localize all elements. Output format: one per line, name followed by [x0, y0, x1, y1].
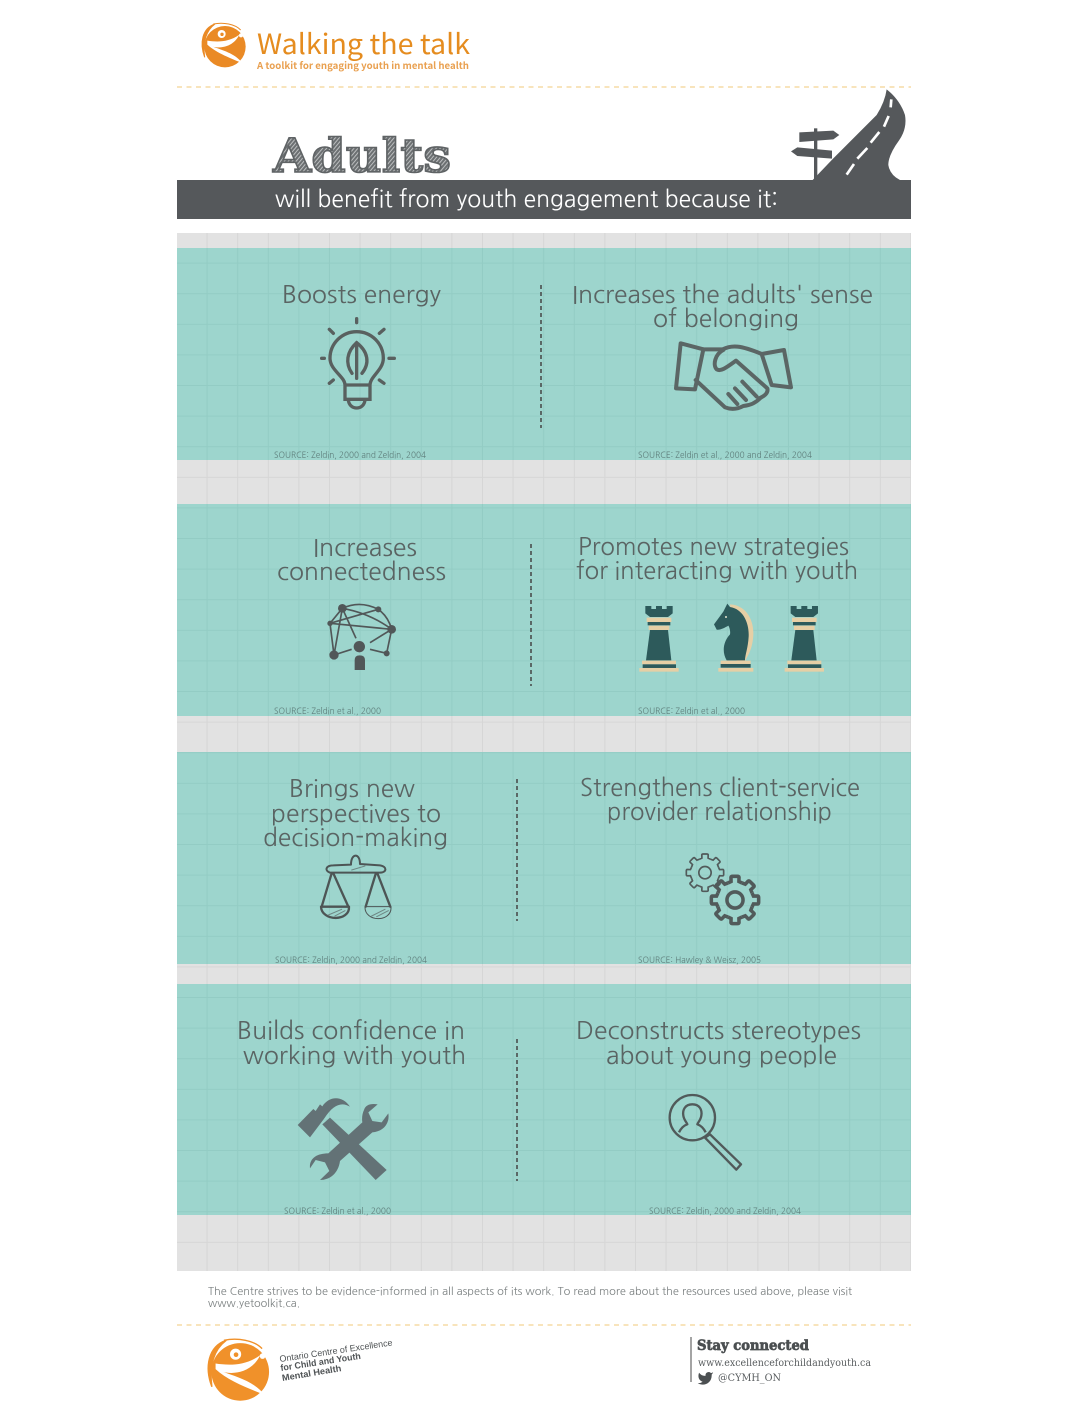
source: SOURCE: Zeldin et al., 2000	[638, 707, 745, 716]
icon: knight	[714, 604, 753, 672]
icon: small gear	[686, 854, 724, 891]
header title: Walking the talk	[257, 23, 471, 63]
evidence statement	[208, 1286, 852, 1309]
icon: hammer and wrench	[298, 1098, 389, 1180]
heading: Deconstructs stereotypes about young people: about young people	[606, 1044, 837, 1068]
source: SOURCE: Hawley & Weisz, 2005	[638, 956, 761, 965]
heading: Builds confidence in working with youth: working with youth	[243, 1044, 466, 1068]
icon: sketched balance scales	[321, 856, 391, 919]
heading: Boosts energy: Boosts energy	[282, 283, 441, 307]
heading: Promotes new strategies for interacting with youth: for interacting with youth	[576, 559, 858, 583]
heading: Strengthens client-service provider relationship: Strengthens client-service	[580, 776, 860, 800]
heading: Adults: Adults	[272, 129, 451, 184]
heading: Brings new perspectives to decision-making: decision-making	[263, 826, 448, 850]
panel: row 3	[177, 752, 911, 965]
evidence statement: www.yetoolkit.ca.	[208, 1298, 300, 1309]
subtitle banner: will benefit from youth engagement because it:	[275, 188, 778, 211]
source: SOURCE: Zeldin, 2000 and Zeldin, 2004	[649, 1207, 801, 1216]
heading: Deconstructs stereotypes about young people	[576, 1019, 861, 1068]
icon: gears	[686, 854, 759, 924]
heading: Deconstructs stereotypes about young people: Deconstructs stereotypes	[576, 1019, 861, 1043]
icon: winding road and signpost	[791, 89, 906, 180]
header tagline: A toolkit for engaging youth in mental health	[256, 58, 469, 72]
source: SOURCE: Zeldin et al., 2000	[274, 707, 381, 716]
contact block	[691, 1337, 871, 1385]
heading: Builds confidence in working with youth	[237, 1019, 466, 1068]
website: www.excellenceforchildandyouth.ca	[698, 1358, 871, 1369]
evidence statement: The Centre strives to be evidence-informed in all aspects of its work. To read more about the resources used above, please visit	[208, 1286, 852, 1297]
source: SOURCE: Zeldin, 2000 and Zeldin, 2004	[274, 451, 426, 460]
icon: twitter bird	[698, 1372, 713, 1385]
footer organisation name	[279, 1337, 393, 1383]
heading: Strengthens client-service provider relationship: provider relationship	[607, 800, 832, 824]
icon: network around a person	[327, 604, 396, 670]
heading: Brings new perspectives to decision-making: perspectives to	[271, 802, 441, 826]
icon: right rook	[785, 606, 824, 672]
heading: Increases the adults' sense of belonging	[572, 283, 873, 331]
panel: row 4	[177, 984, 911, 1216]
heading: Increases connectedness	[277, 536, 446, 584]
heading: Stay connected: Stay connected	[697, 1338, 810, 1354]
heading: Strengthens client-service provider relationship	[580, 776, 860, 824]
heading: Promotes new strategies for interacting with youth: Promotes new strategies	[578, 535, 849, 559]
icon: magnifier over a person	[670, 1095, 741, 1170]
footer logo	[208, 1339, 269, 1401]
heading: Increases connectedness: connectedness	[277, 560, 446, 584]
icon: handshake	[676, 343, 791, 409]
heading: Increases the adults' sense of belonging: Increases the adults' sense	[572, 283, 873, 307]
heading: Increases connectedness: Increases	[313, 536, 417, 560]
footer organisation name: for Child and Youth	[280, 1351, 361, 1373]
footer organisation name: Ontario Centre of Excellence	[279, 1337, 393, 1364]
subtitle banner	[177, 180, 911, 219]
icon: light bulb with leaf	[322, 319, 394, 408]
heading: Brings new perspectives to decision-making	[263, 777, 448, 850]
source: SOURCE: Zeldin et al., 2000	[284, 1207, 391, 1216]
heading: Promotes new strategies for interacting with youth	[576, 535, 858, 583]
heading: Brings new perspectives to decision-making: Brings new	[289, 777, 415, 801]
source: SOURCE: Zeldin, 2000 and Zeldin, 2004	[275, 956, 427, 965]
header logo	[202, 23, 246, 67]
background grid panel	[177, 233, 911, 1271]
heading: Increases the adults' sense of belonging: of belonging	[653, 307, 799, 331]
source: SOURCE: Zeldin et al., 2000 and Zeldin, 2004	[638, 451, 812, 460]
icon: chess pieces	[639, 604, 824, 672]
heading: Builds confidence in working with youth: Builds confidence in	[237, 1019, 465, 1043]
panel: row 2	[177, 504, 911, 716]
icon: left rook	[639, 606, 679, 672]
panel: row 1	[177, 248, 911, 460]
footer organisation name: Mental Health	[281, 1363, 342, 1383]
icon: large gear	[711, 876, 759, 924]
twitter handle: @CYMH_ON	[718, 1373, 781, 1384]
